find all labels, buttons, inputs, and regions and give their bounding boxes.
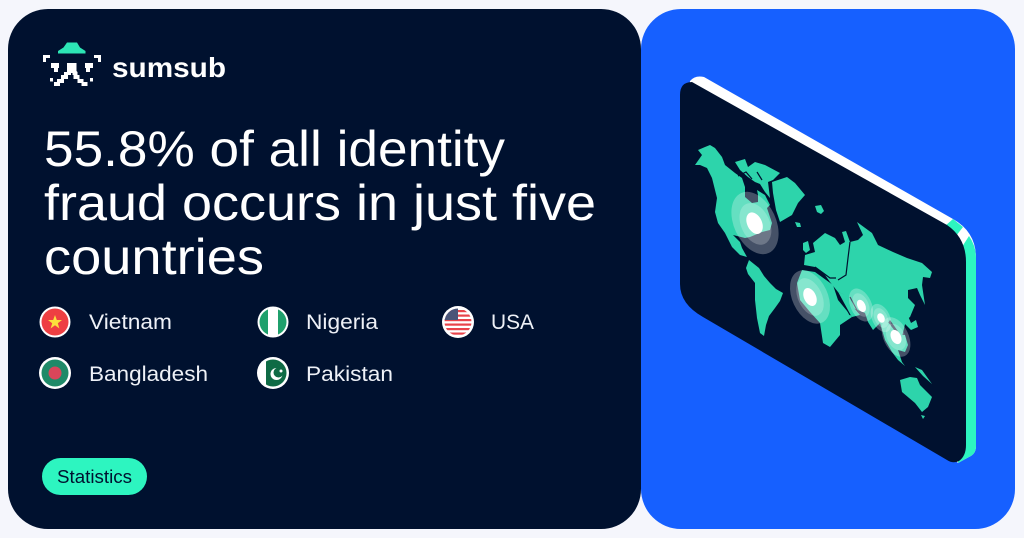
country: Vietnam: Vietnam [89,311,172,334]
Africa [797,270,852,347]
panel: dark text card [8,9,641,529]
heading: fraud occurs in just five [44,175,596,231]
tag: Statistics: Statistics [57,467,132,487]
South America [746,260,783,336]
icon: mint hat [58,42,86,54]
Southeast Asia and islands [880,314,932,384]
country: USA [442,306,534,338]
heading: countries [44,229,264,285]
Eurasia [804,222,932,337]
country: Vietnam [40,306,172,338]
Arctic islands [735,159,780,198]
heading: 55.8% of all identity [44,121,505,177]
sea channels [738,172,858,315]
Tasmania [921,415,925,419]
device edge [680,76,976,463]
hotspot: Vietnam [876,313,916,361]
logo: sumsub [43,42,226,86]
icon: pixel figure [43,55,101,86]
North America [695,145,772,257]
country: USA: USA [491,311,534,334]
country: Bangladesh: Bangladesh [89,363,208,386]
hotspot: Pakistan [844,285,878,325]
panel: blue map card [641,9,1015,529]
Australia [900,377,932,412]
country: Bangladesh [39,357,208,389]
device screen [680,82,966,462]
tag: Statistics [42,458,147,495]
country: Pakistan [257,357,393,389]
hotspot: Bangladesh [867,301,895,335]
Iceland and UK [795,205,824,253]
country: Nigeria [258,306,378,338]
world map [695,145,932,419]
hotspot: USA [722,184,788,262]
country: Pakistan: Pakistan [306,363,393,386]
heading [44,121,596,285]
Arabia [838,292,860,317]
wordmark: sumsub [112,52,226,83]
Greenland [772,177,805,222]
hotspot: Nigeria [782,264,838,330]
country: Nigeria: Nigeria [306,311,378,334]
